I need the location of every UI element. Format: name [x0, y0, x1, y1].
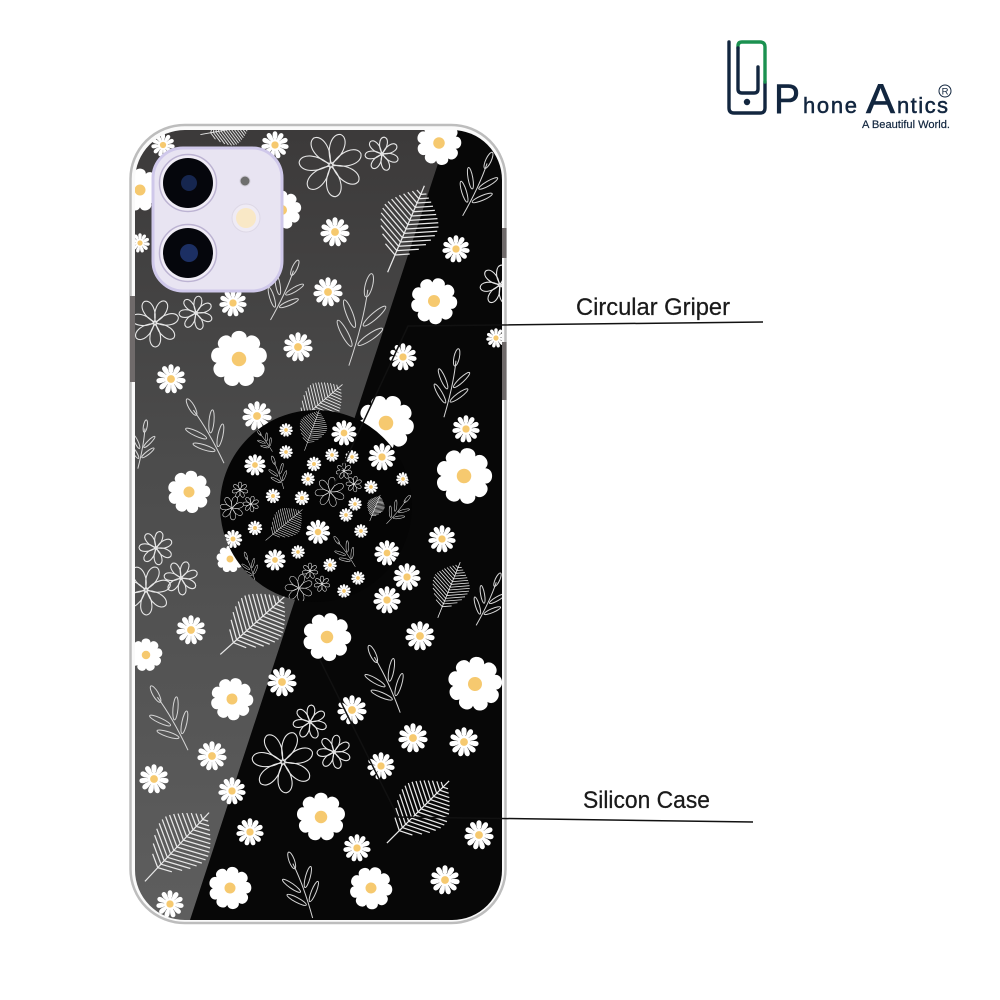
callout line: circular griper	[334, 322, 763, 485]
case side buttons	[130, 228, 506, 400]
logo wordmark: A	[866, 75, 895, 122]
grey reflection panel	[135, 130, 449, 920]
griper pattern	[216, 405, 418, 605]
callout line: silicon case	[320, 660, 753, 822]
logo wordmark	[774, 75, 951, 131]
leaf sprigs	[125, 145, 515, 924]
lower lens	[160, 224, 216, 282]
logo wordmark: ntics	[897, 93, 948, 118]
logo wordmark: hone	[803, 93, 857, 118]
camera module	[153, 148, 282, 291]
logo wordmark: A Beautiful World.	[862, 119, 950, 131]
case back pattern	[135, 130, 502, 920]
callout label: circular griper: Circular Griper	[576, 294, 730, 321]
upper lens	[160, 154, 216, 212]
logo icon: phone outline	[729, 42, 765, 113]
camera plate	[153, 148, 282, 291]
griper disc	[220, 410, 392, 600]
outline flowers	[112, 124, 522, 802]
flash	[232, 204, 260, 232]
logo wordmark: P	[774, 75, 800, 122]
fern leaves	[123, 109, 478, 902]
phone with silicon case	[112, 109, 763, 924]
silicon case frame	[130, 125, 506, 923]
microphone	[240, 176, 250, 186]
circular griper (pop socket)	[216, 405, 418, 605]
daisies	[118, 117, 506, 918]
logo: Phone Antics	[729, 42, 951, 131]
logo wordmark: R	[942, 86, 949, 98]
callout label: silicon case: Silicon Case	[583, 787, 710, 814]
